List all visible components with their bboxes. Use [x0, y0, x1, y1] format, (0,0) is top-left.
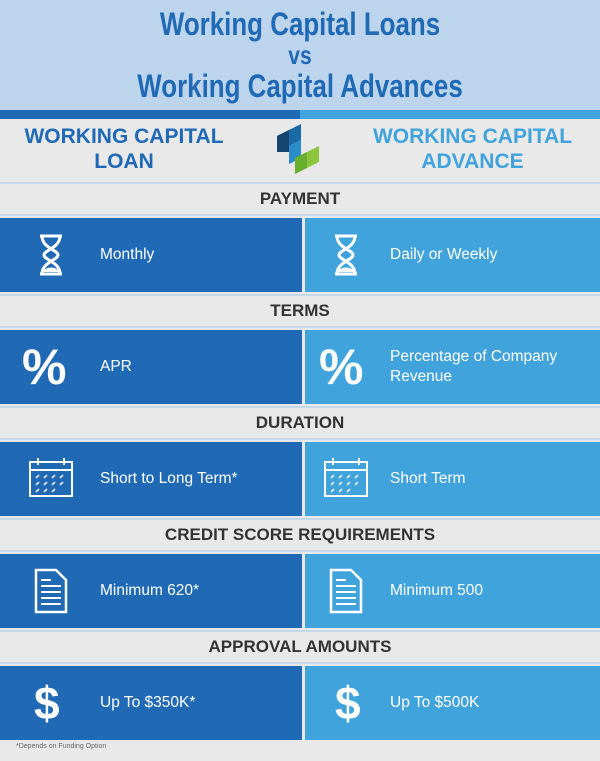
- header: credit score: [0, 518, 600, 552]
- row: terms loan: %: [22, 339, 66, 395]
- header: terms: TERMS: [270, 301, 330, 320]
- row: approval loan: $: [34, 677, 60, 729]
- row: payment loan: [0, 218, 302, 292]
- header: credit score: CREDIT SCORE REQUIREMENTS: [165, 525, 435, 544]
- row: payment loan: Monthly: [100, 246, 154, 263]
- column header: loan: LOAN: [94, 150, 154, 173]
- logo: [277, 124, 319, 174]
- row: terms advance: [305, 330, 600, 404]
- column header: advance: ADVANCE: [421, 150, 524, 173]
- row: approval loan: [0, 666, 302, 740]
- column header: advance: [373, 125, 572, 173]
- color bar: [0, 110, 600, 119]
- column header: advance: WORKING CAPITAL: [373, 125, 572, 148]
- header: duration: [0, 406, 600, 440]
- row: approval advance: $: [335, 677, 361, 729]
- row: duration loan: [0, 442, 302, 516]
- header: terms: [0, 294, 600, 328]
- row: terms loan: [0, 330, 302, 404]
- row: credit advance: Minimum 500: [390, 582, 483, 599]
- header: duration: DURATION: [256, 413, 344, 432]
- row: terms advance: %: [319, 339, 363, 395]
- row: payment advance: Daily or Weekly: [390, 246, 497, 263]
- row: credit advance: [305, 554, 600, 628]
- row: payment advance: [305, 218, 600, 292]
- row: duration advance: [305, 442, 600, 516]
- row: credit loan: Minimum 620*: [100, 582, 199, 599]
- title band: Working Capital Loans: [160, 6, 440, 42]
- row: approval advance: Up To $500K: [390, 694, 479, 711]
- footnote: *Depends on Funding Option: [16, 743, 106, 750]
- row: approval loan: Up To $350K*: [100, 694, 195, 711]
- row: duration loan: Short to Long Term*: [100, 470, 238, 487]
- row: approval advance: [305, 666, 600, 740]
- row: terms loan: APR: [100, 358, 132, 375]
- row: duration advance: Short Term: [390, 470, 466, 487]
- title band: [0, 0, 600, 110]
- title band: Working Capital Advances: [137, 68, 463, 104]
- header: payment: PAYMENT: [260, 189, 340, 208]
- header: approval: [0, 630, 600, 664]
- column header: loan: [24, 125, 224, 173]
- column header: loan: WORKING CAPITAL: [24, 125, 224, 148]
- row: terms advance: Percentage of Company: [390, 348, 557, 365]
- row: credit loan: [0, 554, 302, 628]
- title band: vs: [288, 40, 312, 70]
- header: approval: APPROVAL AMOUNTS: [209, 637, 391, 656]
- row: terms advance: Revenue: [390, 368, 452, 385]
- header: payment: [0, 182, 600, 216]
